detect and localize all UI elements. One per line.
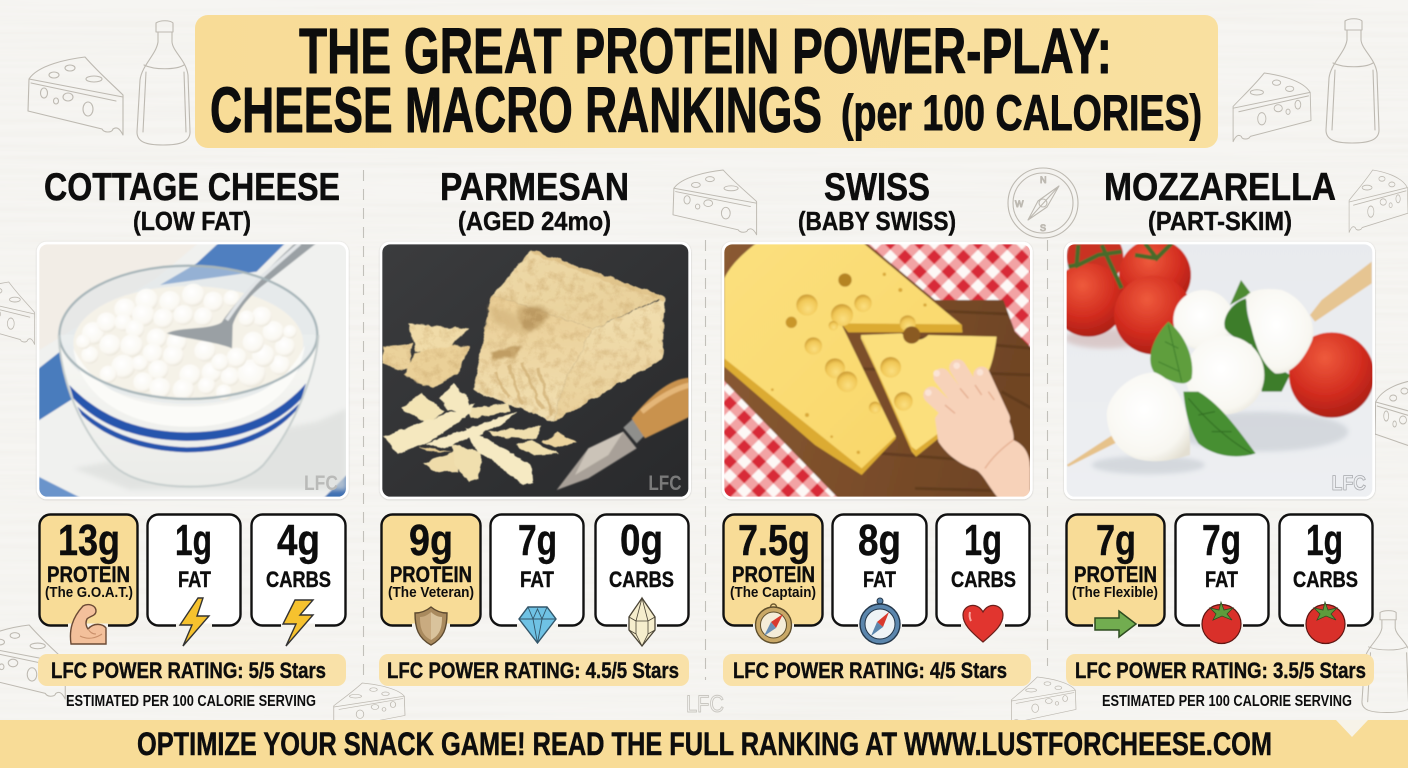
icon: blue compass	[860, 598, 900, 644]
macro box: carbs 1g: 1g	[1306, 516, 1343, 565]
title line 2: (per 100 CALORIES)	[841, 85, 1202, 141]
heading: parmesan: (AGED 24mo)	[458, 206, 611, 236]
icon: tomato	[1306, 602, 1345, 644]
icon: brass compass	[756, 604, 792, 643]
macro box: fat 1g: FAT	[178, 567, 211, 592]
sketch: cheese bottom middle right	[1011, 677, 1076, 724]
icon: diamond	[519, 607, 556, 643]
sketch: cheese left edge	[0, 282, 35, 344]
photo: parmesan wedge on slate	[380, 242, 691, 499]
icon: lightning bolt	[180, 598, 209, 646]
macro box: fat 7g: FAT	[1205, 567, 1238, 592]
footnote: ESTIMATED PER 100 CALORIE SERVING	[1102, 693, 1352, 710]
heading: swiss: SWISS	[824, 166, 930, 209]
title banner	[195, 15, 1218, 148]
macro box: carbs 1g	[1280, 514, 1372, 644]
rating pill	[379, 654, 689, 686]
footnote: ESTIMATED PER 100 CALORIE SERVING	[66, 693, 316, 710]
photo: swiss cheese wheel and baby hand	[722, 242, 1033, 499]
panel: cottage cheese	[37, 166, 350, 710]
sketch: compass: N	[1040, 175, 1046, 185]
rating pill	[1066, 654, 1374, 686]
icon: heart	[963, 605, 1003, 642]
icon: flexed bicep	[70, 605, 106, 644]
panel: parmesan	[379, 166, 691, 686]
icon: tomato	[1202, 602, 1241, 644]
macro box: protein 9g	[382, 514, 480, 645]
sketch: cheese far right	[1349, 170, 1408, 232]
heading: parmesan	[440, 166, 629, 236]
icon: shield	[415, 607, 447, 645]
heading: cottage cheese	[44, 166, 340, 236]
macro box: protein 7.5g: 7.5g	[738, 516, 810, 565]
macro box: carbs 0g	[596, 514, 688, 646]
macro box: carbs 1g: 1g	[964, 516, 1002, 565]
watermark: LFC: LFC	[1332, 471, 1366, 495]
sketch: compass	[1008, 168, 1078, 238]
sketch: milk bottle top left	[137, 21, 190, 145]
sketch: milk bottle bottom right	[1362, 611, 1408, 712]
macro box: protein 7.5g	[724, 514, 822, 643]
macro box: protein 7g: 7g	[1096, 516, 1136, 565]
sketch: cheese top left	[28, 57, 123, 135]
macro box: fat 7g: 7g	[1202, 516, 1241, 565]
sketch: compass: W	[1015, 199, 1024, 209]
macro box: protein 9g: 9g	[409, 516, 453, 565]
sketch: cheese top right	[1233, 73, 1311, 142]
photo: cottage cheese bowl	[37, 242, 350, 499]
macro box: protein 9g: (The Veteran)	[388, 584, 474, 601]
heading: mozzarella: (PART-SKIM)	[1148, 206, 1292, 236]
macro box: protein 13g: PROTEIN	[47, 562, 130, 587]
heading: mozzarella	[1104, 166, 1336, 236]
rating pill: LFC POWER RATING: 4.5/5 Stars	[387, 658, 679, 683]
macro box: fat 8g	[832, 514, 926, 644]
macro box: fat 8g: 8g	[858, 516, 901, 565]
icon: crystal	[629, 598, 655, 646]
rating pill: LFC POWER RATING: 5/5 Stars	[51, 658, 326, 683]
sketch: milk bottle top right	[1326, 19, 1379, 143]
sketch: cheese right lower edge	[1375, 380, 1408, 458]
macro box: carbs 0g: CARBS	[609, 567, 674, 592]
macro box: fat 1g	[148, 514, 240, 646]
macro box: fat 7g	[490, 514, 584, 643]
sketch: cheese between parmesan and swiss	[673, 170, 757, 235]
footer banner	[0, 720, 1408, 768]
heading: parmesan: PARMESAN	[440, 166, 629, 209]
watermark: LFC: LFC	[648, 471, 682, 495]
macro box: protein 7.5g: PROTEIN	[732, 562, 815, 587]
macro box: fat 1g: 1g	[175, 516, 212, 565]
sketch: cheese bottom left	[0, 625, 65, 699]
macro box: protein 13g: (The G.O.A.T.)	[45, 584, 133, 601]
icon: green arrow	[1095, 611, 1136, 637]
macro box: protein 7g: PROTEIN	[1074, 562, 1157, 587]
watermark: LFC: LFC	[304, 471, 338, 495]
macro box: protein 7g	[1066, 514, 1164, 637]
title line 2: CHEESE MACRO RANKINGS	[210, 74, 822, 146]
panel: mozzarella	[1052, 166, 1375, 710]
macro box: fat 7g: FAT	[520, 567, 554, 592]
macro box: protein 7g: (The Flexible)	[1072, 584, 1158, 601]
macro box: protein 7.5g: (The Captain)	[730, 584, 816, 601]
macro box: carbs 1g: CARBS	[1293, 567, 1358, 592]
panel: swiss	[722, 166, 1033, 686]
macro box: carbs 4g: 4g	[277, 516, 320, 565]
rating pill	[38, 654, 346, 686]
macro box: carbs 1g	[936, 514, 1030, 642]
macro box: carbs 0g: 0g	[620, 516, 663, 565]
macro box: protein 13g: 13g	[58, 516, 120, 565]
sketch: compass: S	[1040, 223, 1046, 233]
heading: swiss	[798, 166, 956, 236]
macro box: carbs 4g: CARBS	[266, 567, 331, 592]
macro box: protein 13g	[40, 514, 138, 644]
photo: mozzarella and tomato skewer	[1052, 228, 1375, 499]
macro box: protein 9g: PROTEIN	[390, 562, 472, 587]
sketch: cheese bottom centre	[334, 683, 405, 730]
macro box: fat 7g	[1176, 514, 1268, 644]
heading: mozzarella: MOZZARELLA	[1104, 166, 1336, 209]
macro box: fat 7g: 7g	[518, 516, 557, 565]
heading: cottage cheese: COTTAGE CHEESE	[44, 166, 340, 209]
heading: cottage cheese: (LOW FAT)	[133, 206, 251, 236]
rating pill: LFC POWER RATING: 4/5 Stars	[733, 658, 1007, 683]
column dividers	[364, 170, 1048, 680]
macro box: carbs 4g	[252, 514, 346, 646]
title line 1: THE GREAT PROTEIN POWER-PLAY:	[299, 15, 1112, 87]
macro box: carbs 1g: CARBS	[951, 567, 1016, 592]
heading: swiss: (BABY SWISS)	[798, 206, 956, 236]
macro box: fat 8g: FAT	[863, 567, 896, 592]
icon: lightning bolt	[283, 600, 313, 646]
watermark: LFC: LFC	[686, 691, 724, 718]
